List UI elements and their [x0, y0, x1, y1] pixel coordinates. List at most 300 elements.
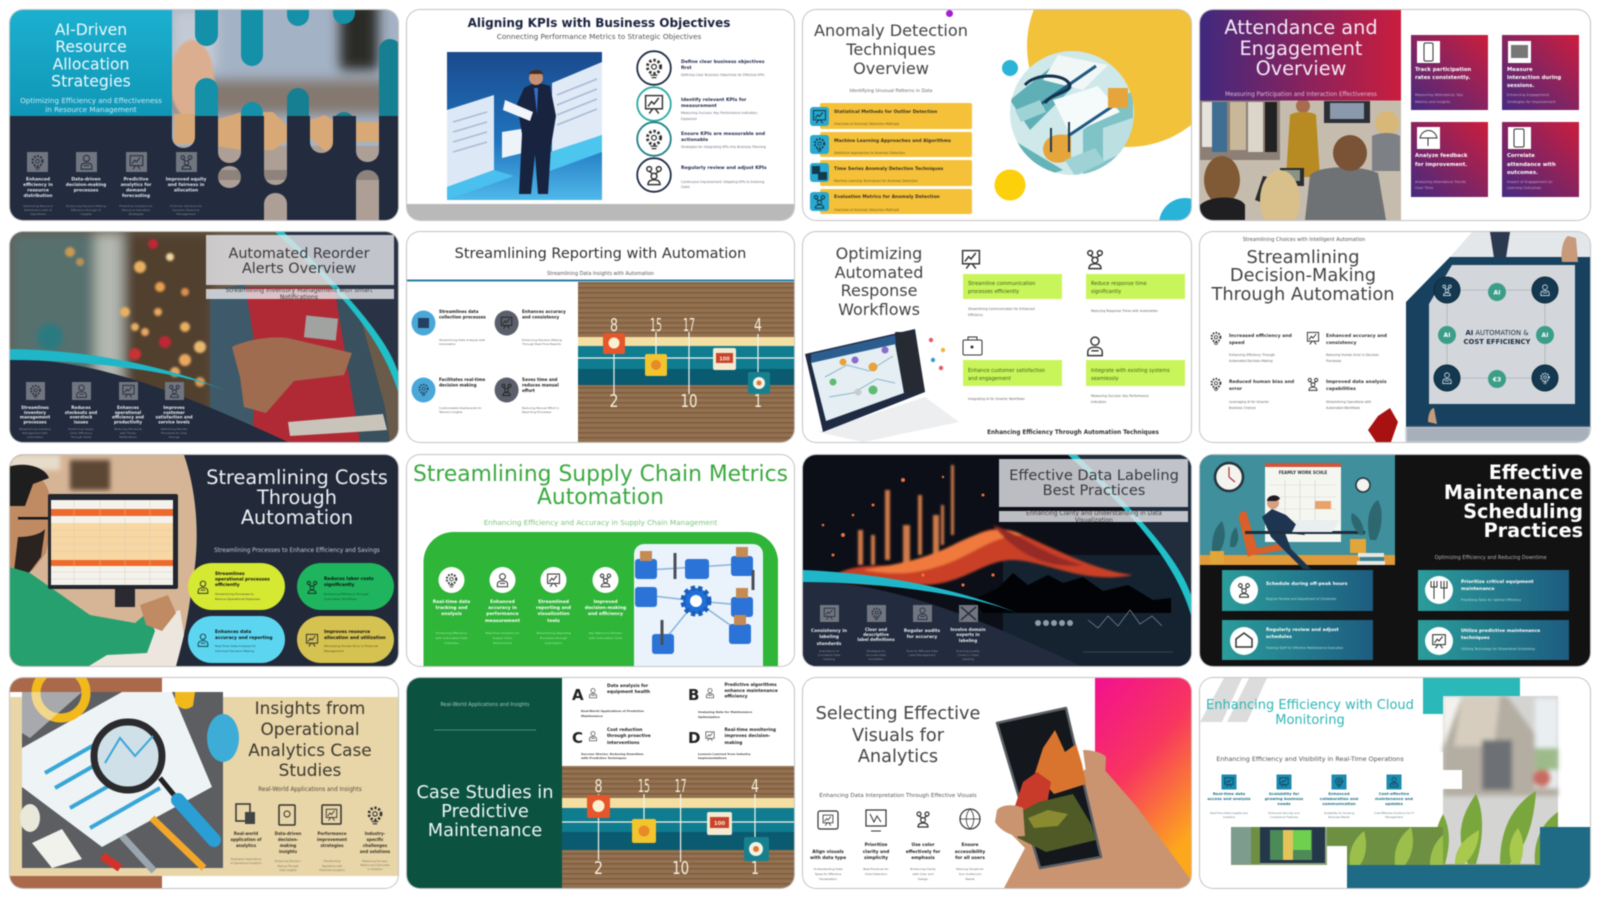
item: improved decisions: Key Metrics to Monitor [589, 631, 623, 635]
card: measure interaction: Enhancing Engagement: [1507, 93, 1550, 97]
item: real-world application [230, 804, 262, 865]
card: track participation: rates consistently. [1415, 75, 1470, 81]
item: cost-effective maintenance: Cost-effective [1379, 791, 1410, 796]
item: streamlined reporting [536, 567, 571, 645]
timeline image [578, 282, 794, 442]
item: performance improvement: Transforming [324, 859, 341, 863]
item: accuracy in measurement [485, 567, 521, 645]
item: evaluation metrics [810, 189, 972, 214]
item: data-driven decisions: processes [74, 188, 99, 194]
title: Streamlining Costs [206, 466, 388, 489]
title: Automated Reorder [228, 246, 370, 262]
item: streamlines processes [188, 563, 285, 610]
item: machine learning: Statistical Approaches to Anomaly Detection [834, 151, 905, 155]
decorative corner cutout [1327, 846, 1347, 865]
slide: Streamlining Reporting with Automation [407, 232, 794, 442]
item: saves time: reduces manual [522, 382, 559, 388]
item: streamline communication: Streamlining Communication for Enhanced [968, 307, 1035, 311]
item: scalability: Enhanced Security and [1268, 811, 1300, 815]
item: predictive analytics: analytics for [121, 182, 152, 188]
item: improved decisions: Improved [593, 599, 618, 605]
accent arc [1068, 455, 1191, 615]
item: data-driven insights: Data-driven [275, 831, 301, 836]
item: improves resource allocation [297, 616, 394, 663]
item: improved decisions: and efficiency [588, 611, 623, 617]
decorative yellow circle [1027, 0, 1229, 147]
item: customer satisfaction: Improves [163, 405, 185, 410]
decorative mosaic blocks [1423, 678, 1520, 714]
card: track participation [1411, 35, 1488, 110]
item: streamlines processes: Streamlining Processes to [215, 592, 254, 596]
item: real-time data: Real-time data [1213, 791, 1246, 796]
item: clarity: Prioritize [865, 842, 887, 848]
photo: person holding AI automation frame: AI [1542, 332, 1548, 339]
item: industry challenges: and solutions [360, 849, 391, 854]
item: enhanced accuracy: Reducing Human Error in Decision [1326, 353, 1379, 357]
item: data-driven insights: decision- [278, 837, 299, 842]
card: off-peak hours: Regular Review and Adjustment of Schedules [1266, 597, 1337, 601]
item: data-driven decisions [66, 152, 106, 216]
item: reduced bias: Reduced human bias and [1229, 379, 1294, 385]
item: data analysis: Streamlining Operations with [1326, 400, 1371, 404]
item A: equipment health: Real-World Applications of Predictive [581, 709, 644, 713]
title: Through Automation [1211, 284, 1394, 305]
item D: real-time monitoring: improves decision- [724, 733, 770, 739]
item: increased efficiency: speed [1229, 340, 1245, 346]
item: real-time decisions: Tailored Insights [438, 410, 463, 414]
card: analyze feedback: for improvement. [1415, 162, 1467, 168]
item: reduced bias: error [1229, 386, 1243, 392]
divider line [407, 280, 794, 282]
item: cost-effective maintenance: Cost-Effective Solutions for IT [1374, 811, 1414, 815]
panel: white content area [1200, 678, 1462, 827]
subtitle: Enhancing Clarity and Understanding in Data [1026, 510, 1162, 517]
card: measure interaction: Measure [1507, 67, 1533, 73]
slide: Streamlining Decision-Making Through Automation [1200, 232, 1590, 442]
title: Streamlining Supply Chain Metrics [413, 462, 788, 487]
item: cost-effective maintenance [1374, 774, 1414, 819]
item: predictive analytics: demand [126, 188, 146, 194]
title: Streamlining Reporting with Automation [455, 246, 746, 262]
item: operational efficiency: Notifications [119, 435, 137, 439]
item: improved equity [166, 152, 207, 216]
title [228, 246, 370, 277]
item: performance improvement: improvement [317, 837, 347, 842]
item: enhanced efficiency: distribution [23, 193, 53, 199]
decorative brown bars [10, 678, 162, 888]
slide: Effective Data Labeling Best Practices [803, 455, 1191, 666]
item: streamlined reporting: Processes through [540, 636, 567, 640]
item B: predictive algorithms: enhance maintenance [724, 688, 778, 694]
caption: Real-World Applications and Insights [441, 702, 530, 708]
item D: real-time monitoring: Lessons Learned from Industry [698, 752, 751, 756]
item: reduces stockouts [65, 382, 97, 439]
title: Alerts Overview [242, 261, 356, 277]
item: consistency: Importance of [819, 649, 840, 653]
subtitle: Optimizing Efficiency and Effectiveness [20, 96, 162, 105]
item: improved equity: allocation [174, 188, 198, 194]
photo: person holding AI automation frame: €3 [1492, 376, 1501, 384]
item: customer satisfaction: and engagement [968, 376, 1011, 382]
item: data-driven insights: Data Insights [279, 868, 297, 872]
item: reduces stockouts: Reduces [71, 405, 91, 410]
title: Selecting Effective [816, 704, 980, 724]
item: increased efficiency: Enhancing Efficiency Through [1229, 353, 1275, 357]
item: data-driven decisions: Insights [80, 212, 92, 216]
item: real-world application: application of [230, 837, 262, 842]
item: real-time tracking [433, 567, 470, 645]
item: increased efficiency: Automated Decision-Making [1229, 359, 1273, 363]
item: performance improvement [317, 805, 347, 872]
accent swoosh [10, 349, 224, 390]
item: operational efficiency: Enhances [117, 405, 140, 410]
item: real-time tracking: Collection [444, 641, 459, 645]
card: critical equipment: Prioritizing Tasks for Optimal Efficiency [1461, 598, 1521, 602]
item: predictive analytics: Predictive [123, 176, 149, 182]
slide: Optimizing Automated Response Workflows [803, 232, 1191, 442]
item: real-time decisions: Facilitates real-time [439, 377, 486, 382]
item: clarity: clarity and [863, 849, 889, 855]
subtitle: Enhancing Data Interpretation Through Effective Visuals [819, 793, 977, 799]
item: real-time decisions: Customizable Dashboards for [439, 406, 482, 410]
item: industry challenges: specific [366, 837, 384, 842]
item: reduce response time [1086, 251, 1185, 313]
photo: wooden arrows and hand [170, 0, 398, 220]
item: data-driven insights [275, 805, 301, 872]
title: Insights from [255, 698, 365, 718]
item: enhanced efficiency: Enhanced [26, 176, 50, 182]
item: scalability: Compliance Features [1270, 815, 1299, 819]
title [1224, 16, 1378, 80]
item: relevant KPIs: measurement [681, 103, 718, 109]
item: measurable KPIs [637, 122, 766, 156]
item: accuracy in measurement: Performance [493, 641, 512, 645]
item: real-world application: Illustrative Applications [231, 857, 262, 861]
subtitle: Real-World Applications and Insights [258, 787, 362, 793]
panel: dark curved band [803, 582, 1081, 666]
title: Strategies [51, 72, 131, 90]
card: analyze feedback: Over Time [1415, 186, 1433, 190]
item: streamlined reporting: visualization [537, 611, 570, 617]
card: regularly review: Training Staff for Effective Maintenance Execution [1265, 646, 1343, 650]
decorative magenta dot [946, 10, 953, 17]
item: integrate systems: Indicators [1091, 400, 1107, 404]
item: improves resource allocation: allocation and utilization [324, 635, 386, 641]
card: predictive techniques: Utilizing Technology for Streamlined Scheduling [1461, 647, 1535, 651]
title: Workflows [838, 300, 920, 319]
item: scalability [1265, 774, 1304, 819]
item: customer satisfaction: service levels [158, 420, 190, 424]
item: relevant KPIs: Measuring Success: Key Performance Indicators [681, 111, 758, 115]
subtitle: Streamlining Data Insights with Automation [547, 271, 654, 277]
title: Monitoring [1275, 713, 1345, 728]
item: predictive analytics: Strategies [129, 212, 144, 216]
panel: gradient title block [1200, 10, 1401, 100]
item: real-time tracking: Enhancing Efficiency [436, 631, 467, 635]
item: statistical methods: Overview of Anomaly Detection Methods [834, 122, 900, 126]
title: Predictive [441, 801, 529, 822]
item: clear definitions: Clear and [865, 627, 887, 632]
card: correlate attendance: outcomes. [1507, 170, 1538, 176]
slide: AI-Driven Resource Allocation Strategies [10, 10, 398, 220]
item: reduces labor costs [297, 563, 394, 610]
timeline image: 15 [638, 776, 650, 797]
panel: beige band [10, 697, 398, 876]
item: performance improvement: strategies [321, 843, 344, 848]
subtitle: Optimizing Efficiency and Reducing Downtime [1435, 555, 1547, 561]
subtitle: Streamlining Inventory Management with Smart [225, 287, 373, 294]
card: critical equipment: maintenance [1461, 586, 1495, 592]
item: enhances data accuracy: Informed Decision-Making [215, 649, 254, 653]
title [206, 466, 388, 529]
item: customer satisfaction [963, 337, 1062, 401]
item: real-time decisions: decision making [439, 382, 477, 388]
slide: Selecting Effective Visuals for Analytics [803, 678, 1191, 888]
subtitle [20, 96, 162, 114]
card: critical equipment: Prioritize critical equipment [1461, 579, 1534, 585]
title: Maintenance [428, 820, 542, 841]
card: track participation: Measuring Attendance: Key [1415, 93, 1463, 97]
timeline image: 1 [751, 858, 759, 879]
title: Best Practices [1043, 482, 1145, 499]
item: reduces stockouts: Through Alerts [70, 435, 92, 439]
item: data-driven decisions: Efficiency through AI [71, 208, 101, 212]
item: streamlined reporting: tools [547, 618, 560, 624]
item: accuracy [495, 309, 566, 346]
card: regularly review: schedules [1266, 634, 1292, 640]
title [835, 244, 923, 319]
title [1444, 461, 1583, 542]
item: predictive analytics [119, 152, 153, 216]
item: streamlines processes: Reduce Operational Expenses [215, 597, 260, 601]
card: correlate attendance: Learning Outcomes [1507, 186, 1541, 190]
item: customer satisfaction: Processes for Cost [161, 431, 188, 435]
slide: Insights from Operational Analytics Case Studies [10, 678, 398, 888]
item: reduces labor costs: Reduces labor costs [324, 576, 374, 582]
title: Resource [55, 38, 127, 56]
item: accuracy: Enhances accuracy [522, 309, 566, 314]
photo: person holding AI automation frame: AI [1444, 332, 1450, 339]
item: domain experts: experts in [956, 632, 980, 637]
item: streamline communication: processes efficiently [968, 289, 1019, 295]
item B: predictive algorithms: B [688, 686, 699, 704]
item: consistency: Consistent Data [818, 653, 840, 657]
photo: analyst at a monitor [5, 455, 197, 666]
item: reduces stockouts: issues [74, 420, 89, 424]
notch and dark teal footer [1347, 827, 1590, 888]
item: data analysis: Improved data analysis [1326, 379, 1387, 385]
item: real-time tracking: Real-time data [433, 599, 470, 605]
item: accuracy in measurement: measurement [485, 618, 521, 624]
item: clarity: Best Practices for [863, 867, 889, 871]
title: Overview [853, 59, 929, 78]
item: industry challenges: challenges [363, 843, 388, 848]
item: domain experts: Ensuring Quality [956, 649, 980, 653]
title: Response [841, 281, 917, 300]
photo: magnifying glass over reports [20, 668, 239, 871]
item B: predictive algorithms: Optimization [698, 715, 720, 719]
item: real-time tracking: tracking and [435, 605, 468, 611]
item: accessibility: Ensure [961, 842, 979, 848]
item: clarity: simplicity [864, 855, 888, 861]
item: customer satisfaction: customer [163, 410, 185, 415]
item: performance improvement: Performance [318, 831, 347, 836]
item: real-time data: access and analysis [1207, 796, 1251, 801]
card: off-peak hours: Schedule during off-peak hours [1266, 581, 1348, 587]
card: analyze feedback: Analyze feedback [1415, 153, 1468, 159]
item: customer satisfaction [155, 382, 193, 439]
item: accessibility [955, 809, 985, 881]
slide: Attendance and Engagement Overview [1200, 10, 1590, 220]
timeline image: 15 [650, 315, 662, 336]
timeline image: 100 [719, 356, 730, 362]
item: define objectives: Define clear business objectives [681, 59, 765, 65]
item: streamlines inventory: processes [23, 420, 47, 424]
item: review KPIs [637, 158, 767, 192]
item: data analysis: Automated Workflows [1326, 406, 1360, 410]
panel: translucent subtitle strip [206, 289, 394, 299]
panel: translucent title box [206, 235, 394, 285]
item: evaluation metrics: Overview of Anomaly Detection Methods [834, 208, 900, 212]
item: streamlines processes: Streamlines [215, 571, 245, 577]
title: Automation [537, 485, 664, 510]
item: accuracy in measurement: Supply Chain [493, 636, 512, 640]
card: predictive techniques: Utilize predictive maintenance [1461, 628, 1540, 634]
item: relevant KPIs [637, 87, 758, 121]
subtitle: Enhancing Efficiency and Accuracy in Supply Chain Management [484, 518, 717, 527]
item: streamlines inventory: inventory [24, 410, 46, 415]
item: align visuals: Understanding Data [813, 867, 843, 871]
item: streamline communication: Streamline communication [968, 281, 1035, 287]
item: consistency: standards [817, 641, 842, 647]
title: Scheduling [1463, 500, 1583, 523]
item: integrate systems: Integrate with existing systems [1091, 368, 1170, 374]
item: accessibility: for all users [955, 855, 985, 861]
item: data-driven decisions: Enhancing Decision-Making [66, 204, 106, 208]
item: clear definitions: descriptive [863, 632, 889, 637]
item: integrate systems: seamlessly [1091, 376, 1119, 382]
item: accuracy in measurement: Real-Time Analytics for [485, 631, 520, 635]
item: reduces stockouts: Enhancing Supply [68, 427, 94, 431]
item: increased efficiency: Increased efficiency and [1229, 333, 1292, 339]
item: clear definitions [857, 605, 895, 661]
title: Visuals for [852, 726, 945, 746]
item: domain experts [950, 605, 986, 661]
title [248, 698, 372, 780]
decorative dark top-right corner [1071, 455, 1191, 605]
item: streamlines inventory: management [20, 414, 50, 420]
item: consistency: labeling [819, 634, 839, 640]
title: Enhancing Efficiency with Cloud [1206, 698, 1414, 713]
item: operational efficiency: Reducing Stockouts [114, 427, 142, 431]
item: improved decisions: with Automation Tools [589, 636, 623, 640]
item: reduces stockouts: overstock [70, 414, 93, 420]
item: domain experts: Involve domain [950, 627, 986, 632]
item: predictive analytics: Resource Allocation [122, 208, 150, 212]
item: statistical methods: Statistical Methods for Outlier Detection [834, 109, 937, 115]
accent swoosh [803, 570, 1017, 613]
item: predictive analytics: forecasting [122, 193, 150, 199]
item: data collection: Streamlining Data Analysis with [439, 338, 485, 342]
item: define objectives [637, 51, 765, 85]
timeline image: 8 [594, 776, 602, 797]
item: machine learning [810, 132, 972, 157]
panel: green block [424, 532, 778, 666]
bottom caption: Enhancing Efficiency Through Automation Techniques [987, 430, 1160, 436]
timeline image: 100 [714, 821, 725, 827]
item: measurable KPIs: Strategies for Integrating KPIs Into Business Planning [681, 145, 766, 149]
item D: real-time monitoring: Implementations [698, 756, 727, 760]
title [1206, 698, 1414, 728]
title [814, 21, 968, 78]
item: collaboration [1320, 774, 1358, 819]
item: enhances data accuracy: accuracy and reporting [215, 635, 273, 641]
photo: hand holding phone with 3D chart [995, 708, 1191, 888]
item: regular audits: for accuracy [907, 634, 937, 640]
title: Analytics Case [248, 740, 372, 760]
item: relevant KPIs: Identify relevant KPIs for [681, 97, 747, 103]
item: domain experts: Labeling [962, 657, 974, 661]
title: Effective Data Labeling [1009, 467, 1179, 484]
item: enhanced accuracy: Processes [1326, 359, 1342, 363]
timeline image: 2 [594, 858, 603, 879]
title [816, 704, 980, 767]
item: color emphasis: emphasis [911, 855, 935, 861]
item: streamline communication [963, 251, 1062, 317]
panel: dark lower band [10, 116, 398, 220]
title: Engagement [1240, 37, 1363, 60]
item C: cost reduction: interventions [607, 740, 640, 746]
item: relevant KPIs: Explained [681, 117, 697, 121]
footer band [407, 204, 794, 220]
timeline image: 8 [610, 315, 618, 336]
title: Decision-Making [1230, 265, 1376, 286]
item: enhances data accuracy: Real-Time Data Analysis for [215, 644, 257, 648]
item: reduce response time: significantly [1091, 289, 1121, 295]
item: real-world application: of Operational Analytics [230, 861, 262, 865]
decorative red hexagon [1368, 408, 1398, 442]
item: improves resource allocation: Management [324, 649, 345, 653]
item: domain experts: Control in Data [957, 653, 979, 657]
item: improved equity: AI-Driven Solutions for [170, 204, 203, 208]
item: customer satisfaction: satisfaction and [155, 414, 193, 420]
timeline image: 4 [754, 315, 762, 336]
panel: dark green side block [407, 678, 562, 888]
item: clear definitions: label definitions [857, 637, 895, 642]
illustration: workflow computer [805, 329, 959, 442]
item: reduces labor costs: Enhancing Efficiency Through [324, 592, 369, 596]
item: streamlined reporting: Streamlining Reporting [536, 631, 571, 635]
item: define objectives: Defining Clear Business Objectives for Effective KPIs [681, 73, 765, 77]
accent arc [275, 232, 398, 392]
panel: pink to orange gradient [1095, 678, 1191, 888]
item: industry challenges: Industry- [365, 831, 386, 836]
photo: presenter in a meeting room [1200, 99, 1401, 230]
item: collaboration: communication [1322, 801, 1356, 806]
title [413, 462, 788, 510]
item: data collection: Automation [439, 342, 456, 346]
item: saves time: Reporting Processes [522, 410, 552, 414]
item: cost-effective maintenance: Management [1385, 815, 1403, 819]
item: time series [810, 160, 972, 186]
subtitle [1026, 510, 1162, 524]
item A: equipment health [572, 683, 650, 718]
item: performance improvement: Operations with [322, 864, 343, 868]
item: consistency [811, 605, 847, 661]
timeline image: 4 [751, 776, 759, 797]
item: review KPIs: Regularly review and adjust KPIs [681, 165, 767, 171]
item: data collection [412, 309, 486, 346]
